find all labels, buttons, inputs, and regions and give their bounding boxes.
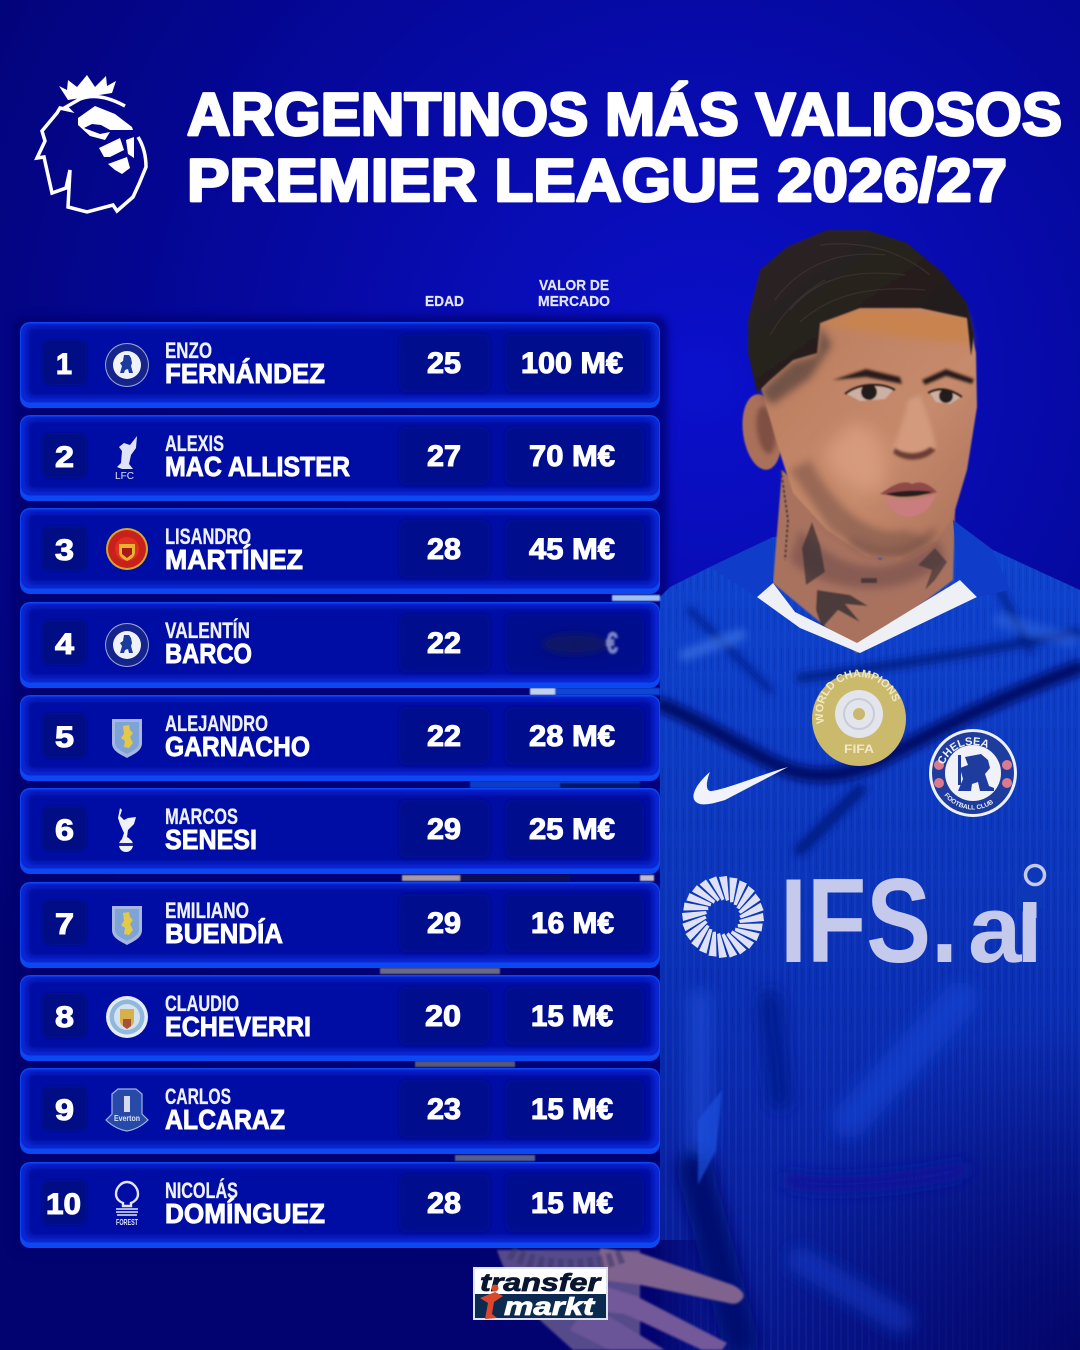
row 1: Enzo Fernández bbox=[20, 322, 660, 408]
chin stubble bbox=[850, 530, 935, 553]
title: PREMIER LEAGUE 2026/27 bbox=[187, 147, 1007, 214]
jersey patch: FIFA World Champions bbox=[812, 670, 906, 766]
nose bbox=[892, 395, 936, 458]
column header: valor de mercado: VALOR DE bbox=[539, 277, 609, 294]
row 10: Nicolás Domínguez: FOREST bbox=[116, 1218, 138, 1227]
row 9: Carlos Alcaraz: 15 M€ bbox=[531, 1093, 613, 1126]
face bbox=[760, 300, 977, 560]
jersey logo: Nike swoosh bbox=[693, 767, 788, 804]
row 5: Alejandro Garnacho: GARNACHO bbox=[165, 731, 310, 762]
crown bbox=[59, 75, 116, 100]
jersey patch: FIFA World Champions: WORLD CHAMPIONS bbox=[815, 670, 900, 724]
hand bbox=[497, 1248, 744, 1350]
column header: edad: EDAD bbox=[425, 293, 464, 310]
row 1: Enzo Fernández: 25 bbox=[427, 347, 461, 380]
row 7: Emiliano Buendía: 29 bbox=[427, 907, 461, 940]
row 3: Lisandro Martínez: 28 bbox=[427, 533, 461, 566]
row 6: Marcos Senesi: 29 bbox=[427, 813, 461, 846]
column header: valor de mercado: MERCADO bbox=[538, 293, 610, 310]
row 10: Nicolás Domínguez: NICOLÁS bbox=[165, 1178, 238, 1203]
Transfermarkt logo: markt bbox=[504, 1293, 596, 1321]
row 5: Alejandro Garnacho bbox=[20, 695, 660, 781]
row 10: Nicolás Domínguez: 15 M€ bbox=[531, 1187, 613, 1220]
row 2: Alexis Mac Allister: MAC ALLISTER bbox=[165, 451, 350, 482]
row 10: Nicolás Domínguez: 28 bbox=[427, 1187, 461, 1220]
row 1: Enzo Fernández: FERNÁNDEZ bbox=[165, 358, 325, 389]
row 10: Nicolás Domínguez bbox=[20, 1162, 660, 1248]
Transfermarkt logo: transfer bbox=[480, 1269, 602, 1297]
row 7: Emiliano Buendía: 7 bbox=[55, 908, 74, 941]
row 1: Enzo Fernández: ENZO bbox=[165, 338, 212, 363]
row 2: Alexis Mac Allister bbox=[20, 415, 660, 501]
row 6: Marcos Senesi: 25 M€ bbox=[529, 813, 615, 846]
row 4: Valentín Barco: 4 bbox=[55, 628, 74, 661]
row 8: Claudio Echeverri: 15 M€ bbox=[531, 1000, 613, 1033]
row 10: Nicolás Domínguez: DOMÍNGUEZ bbox=[165, 1198, 325, 1229]
arm fragments visible between table rows bbox=[380, 595, 660, 1161]
row 6: Marcos Senesi bbox=[20, 788, 660, 874]
row 8: Claudio Echeverri bbox=[20, 975, 660, 1061]
row 7: Emiliano Buendía: 16 M€ bbox=[531, 907, 614, 940]
jersey sponsor: IFS.ai wordmark: i bbox=[1016, 876, 1043, 983]
row 2: Alexis Mac Allister: 70 M€ bbox=[529, 440, 615, 473]
row 4: Valentín Barco: BARCO bbox=[165, 638, 252, 669]
fade hairline shadow bbox=[760, 325, 832, 405]
hair highlights bbox=[770, 244, 930, 335]
row 8: Claudio Echeverri: ECHEVERRI bbox=[165, 1011, 311, 1042]
jersey folds bbox=[662, 590, 1078, 850]
hair bbox=[748, 230, 974, 393]
neck bbox=[773, 470, 955, 653]
row 7: Emiliano Buendía bbox=[20, 882, 660, 968]
row 4: Valentín Barco: VALENTÍN bbox=[165, 618, 250, 643]
player photo: Enzo Fernández bbox=[379, 229, 1080, 1350]
row 5: Alejandro Garnacho: 28 M€ bbox=[529, 720, 615, 753]
blue collar sides bbox=[710, 520, 1010, 597]
row 6: Marcos Senesi: 6 bbox=[55, 814, 74, 847]
row 2: Alexis Mac Allister: ALEXIS bbox=[165, 431, 224, 456]
row 1: Enzo Fernández: 100 M€ bbox=[521, 347, 623, 380]
row 2: Alexis Mac Allister: 27 bbox=[427, 440, 461, 473]
title: ARGENTINOS MÁS VALIOSOS bbox=[187, 81, 1062, 148]
row 3: Lisandro Martínez: LISANDRO bbox=[165, 524, 251, 549]
neck tattoos bbox=[781, 470, 947, 628]
row 3: Lisandro Martínez: MARTÍNEZ bbox=[165, 544, 303, 575]
dark shadow behind the table bbox=[12, 316, 668, 1254]
row 1: Enzo Fernández: 1 bbox=[56, 348, 72, 381]
row 3: Lisandro Martínez: 3 bbox=[55, 534, 74, 567]
row 10: Nicolás Domínguez: 10 bbox=[46, 1188, 81, 1221]
row 5: Alejandro Garnacho: 22 bbox=[427, 720, 461, 753]
row 9: Carlos Alcaraz: CARLOS bbox=[165, 1084, 231, 1109]
row 2: Alexis Mac Allister: 2 bbox=[55, 441, 74, 474]
row 8: Claudio Echeverri: 20 bbox=[425, 1000, 461, 1033]
row 8: Claudio Echeverri: 8 bbox=[55, 1001, 74, 1034]
row 7: Emiliano Buendía: BUENDÍA bbox=[165, 918, 283, 949]
jersey crest: Chelsea bbox=[929, 729, 1017, 817]
Transfermarkt logo bbox=[473, 1267, 608, 1321]
row 9: Carlos Alcaraz: 23 bbox=[427, 1093, 461, 1126]
jersey crest: Chelsea: CHELSEA bbox=[938, 737, 988, 764]
row 4: Valentín Barco: 22 bbox=[427, 627, 461, 660]
eyes bbox=[847, 386, 893, 401]
row 4: Valentín Barco bbox=[20, 602, 660, 688]
jersey sponsor: IFS.ai wordmark: a bbox=[968, 876, 1022, 983]
jersey bbox=[655, 520, 1080, 1350]
white collar bbox=[757, 580, 977, 653]
lion face bbox=[78, 106, 133, 140]
row 6: Marcos Senesi: MARCOS bbox=[165, 804, 238, 829]
Premier League lion logo bbox=[37, 75, 146, 212]
row 9: Carlos Alcaraz: ALCARAZ bbox=[165, 1104, 285, 1135]
row 3: Lisandro Martínez: 45 M€ bbox=[529, 533, 615, 566]
row 2: Alexis Mac Allister: LFC bbox=[115, 471, 134, 482]
row 7: Emiliano Buendía: EMILIANO bbox=[165, 898, 249, 923]
jersey sponsor: IFS.ai swirl bbox=[682, 876, 764, 958]
row 9: Carlos Alcaraz: 9 bbox=[55, 1094, 74, 1127]
row 4: Valentín Barco: € bbox=[606, 627, 618, 660]
eyebrows bbox=[833, 369, 974, 385]
jersey patch: FIFA World Champions: FIFA bbox=[844, 742, 874, 756]
row 8: Claudio Echeverri: CLAUDIO bbox=[165, 991, 239, 1016]
row 5: Alejandro Garnacho: 5 bbox=[55, 721, 74, 754]
jersey crest: Chelsea: FOOTBALL CLUB bbox=[944, 792, 993, 810]
jersey sponsor: IFS.ai wordmark: IFS. bbox=[780, 854, 958, 988]
title bbox=[187, 81, 1062, 214]
row 6: Marcos Senesi: SENESI bbox=[165, 824, 257, 855]
row 3: Lisandro Martínez bbox=[20, 508, 660, 594]
lion mane outline bbox=[37, 97, 146, 212]
column header: valor de mercado bbox=[538, 277, 610, 310]
ear bbox=[738, 392, 786, 472]
mouth bbox=[880, 482, 937, 496]
row 5: Alejandro Garnacho: ALEJANDRO bbox=[165, 711, 268, 736]
row 9: Carlos Alcaraz bbox=[20, 1068, 660, 1154]
row 9: Carlos Alcaraz: Everton bbox=[114, 1114, 140, 1123]
